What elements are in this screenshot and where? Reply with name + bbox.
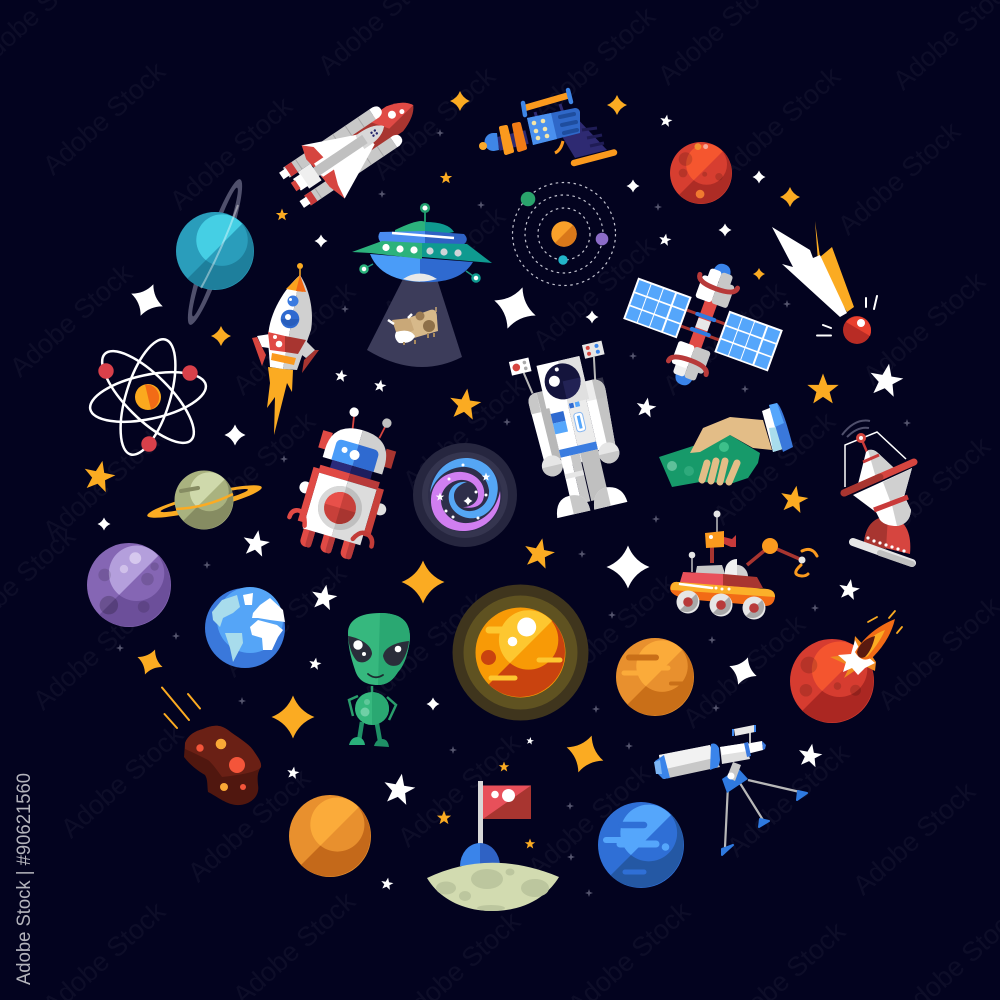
watermark text: Adobe Stock <box>862 431 996 556</box>
watermark text: Adobe Stock <box>847 776 981 901</box>
icon: spiral galaxy <box>413 443 517 547</box>
icon: ray gun <box>479 90 614 163</box>
watermark text: Adobe Stock <box>377 201 511 326</box>
icon: handshake <box>659 403 793 487</box>
watermark text: Adobe Stock <box>547 568 681 693</box>
icon: lunar rover <box>670 510 817 620</box>
watermark text: Adobe Stock <box>857 266 991 391</box>
watermark text: Adobe Stock <box>712 61 846 186</box>
watermark text: Adobe Stock <box>522 758 656 883</box>
watermark text: Adobe Stock <box>527 231 661 356</box>
planet: earth <box>205 587 285 668</box>
icon: flag on the moon <box>427 781 559 911</box>
planet: orange plain <box>289 795 371 877</box>
watermark text: Adobe Stock <box>721 738 855 863</box>
planet: teal ringed <box>176 176 254 328</box>
planet: red with meteor impact <box>790 611 902 723</box>
image id credit: Adobe Stock | #90621560 <box>14 773 35 985</box>
icon: asteroid <box>162 688 261 805</box>
icon: green alien <box>348 613 410 747</box>
planet: red mars <box>670 142 732 204</box>
watermark text: Adobe Stock <box>367 61 501 186</box>
icon: telescope <box>654 725 807 855</box>
gold four-point stars <box>132 91 800 779</box>
icon: space station with solar panels <box>609 238 797 411</box>
watermark text: Adobe Stock <box>4 258 138 383</box>
planet: olive ringed <box>145 470 264 530</box>
watermark text: Adobe Stock <box>37 421 171 546</box>
icon: satellite dish <box>842 421 914 564</box>
icon: rocket <box>252 263 319 435</box>
cow <box>388 307 438 345</box>
watermark text: Adobe Stock <box>832 116 966 241</box>
watermark text: Adobe Stock <box>164 91 298 216</box>
icon: glowing sun <box>452 584 588 720</box>
watermark text: Adobe Stock <box>392 728 526 853</box>
watermark text: Adobe Stock <box>707 406 841 531</box>
meteor impact <box>830 611 902 678</box>
icon: flying saucer abducting a cow <box>352 204 492 367</box>
watermark text: Adobe Stock <box>182 763 316 888</box>
solar system diagram <box>512 182 616 286</box>
watermark text: Adobe Stock <box>527 1 661 126</box>
icon: space shuttle <box>274 81 435 221</box>
watermark text: Adobe Stock <box>657 276 791 401</box>
planet: purple <box>87 543 171 627</box>
watermark text: Adobe Stock <box>397 371 531 496</box>
watermark text: Adobe Stock <box>37 56 171 181</box>
white five-point stars <box>241 114 905 890</box>
watermark text: Adobe Stock <box>227 276 361 401</box>
planet: orange banded <box>616 638 694 716</box>
right flag <box>582 341 605 359</box>
watermark text: Adobe Stock <box>218 558 352 683</box>
gold five-point stars <box>81 172 839 848</box>
watermark text: Adobe Stock <box>55 719 189 844</box>
icon: atom <box>86 333 210 461</box>
icon: comet <box>772 221 877 344</box>
watermark text: Adobe Stock <box>187 406 321 531</box>
watermark text: Adobe Stock <box>27 591 161 716</box>
watermark text: Adobe Stock <box>357 586 491 711</box>
icon: robot <box>283 398 412 566</box>
white four-point stars <box>98 170 766 710</box>
left flag <box>509 358 532 376</box>
watermark text: Adobe Stock <box>677 609 811 734</box>
icon: astronaut <box>509 341 638 521</box>
small grey sparkles <box>116 129 911 897</box>
planet: blue banded <box>598 802 684 888</box>
